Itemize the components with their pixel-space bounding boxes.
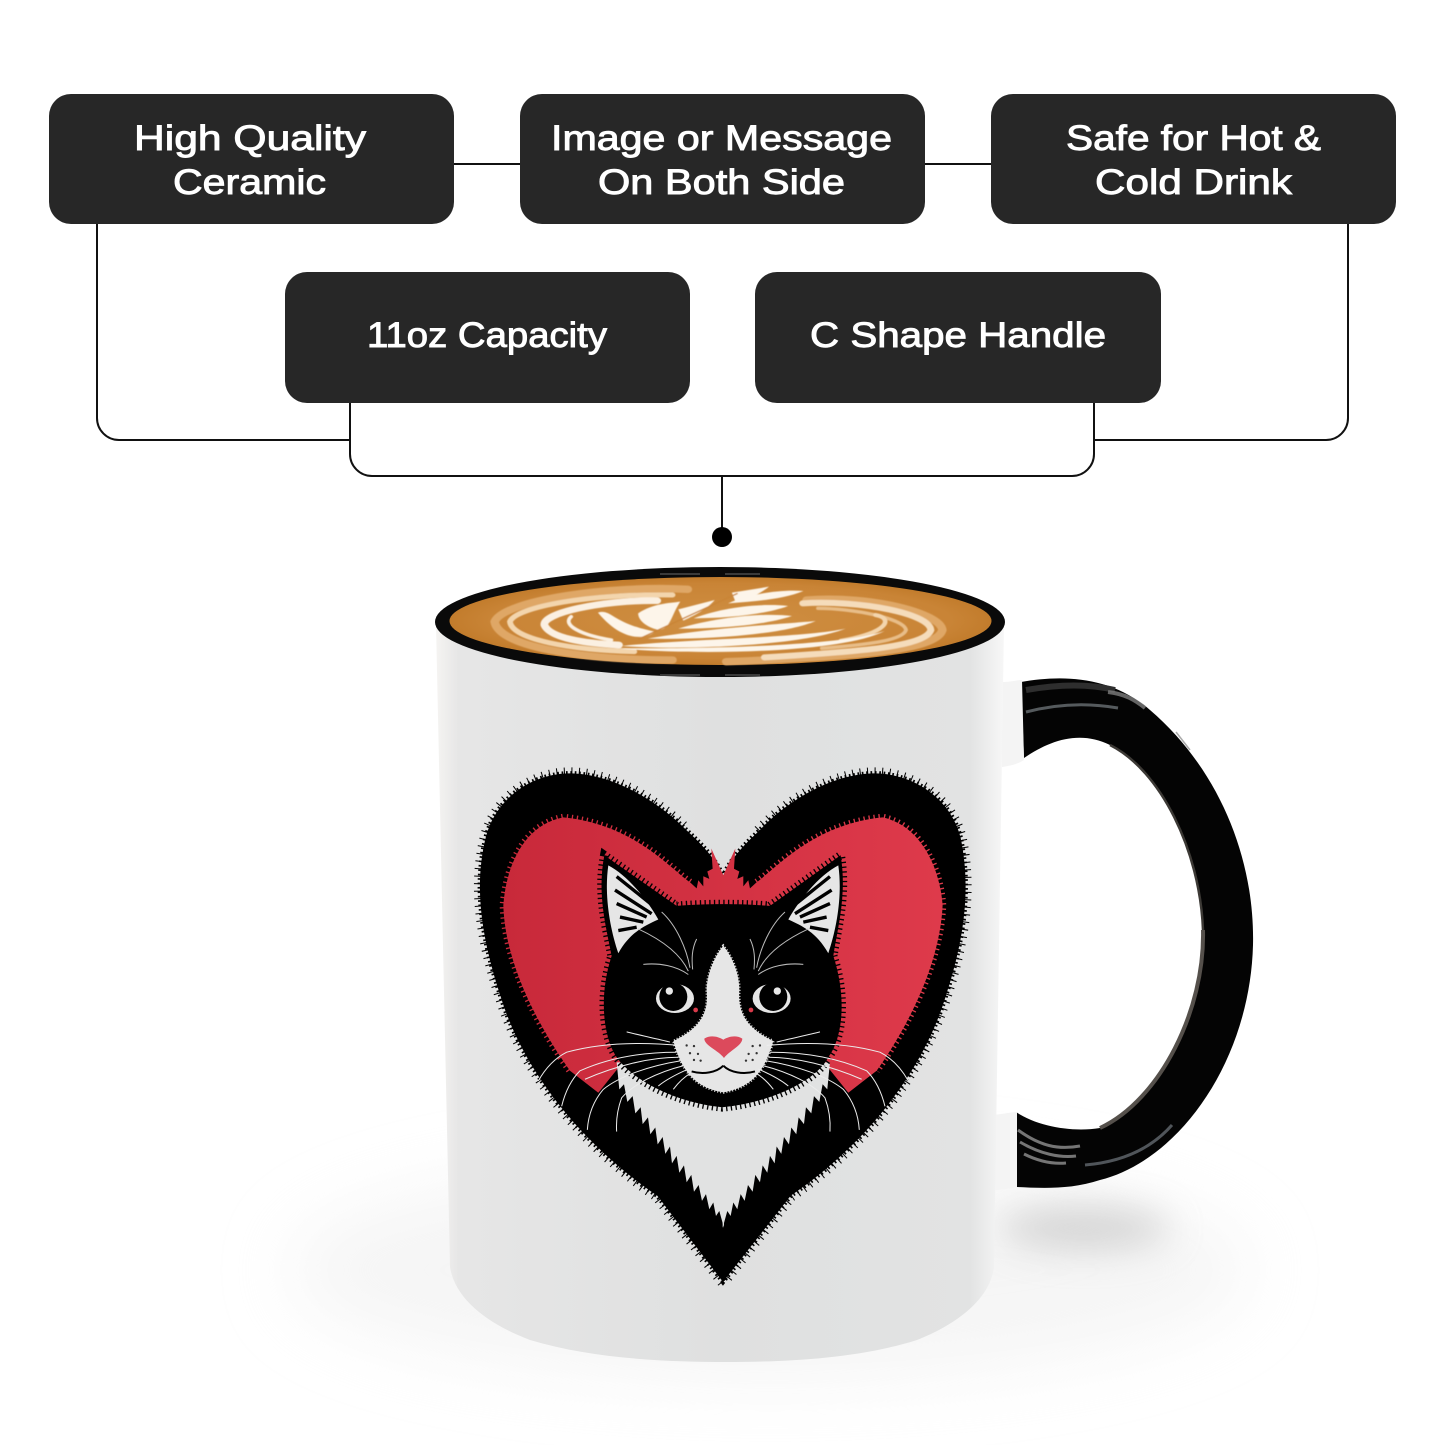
- white face blaze and muzzle: [673, 946, 773, 1092]
- feature box: High Quality Ceramic: [49, 94, 454, 224]
- feature box: Image or Message On Both Side: [520, 94, 925, 224]
- feature box: C Shape Handle: [755, 272, 1161, 403]
- right half face details: [723, 865, 908, 1132]
- feature box: 11oz Capacity: 11oz Capacity: [367, 316, 608, 355]
- feature box: Safe for Hot & Cold Drink: Safe for Hot &: [1066, 119, 1321, 158]
- mug body: [436, 625, 1024, 1362]
- mug ground shadow: [290, 1160, 1250, 1380]
- feature box: Safe for Hot & Cold Drink: Cold Drink: [1095, 163, 1293, 202]
- red heart interior: [503, 817, 943, 1093]
- feature box: High Quality Ceramic: High Quality: [134, 119, 367, 158]
- left half face details: [538, 865, 723, 1132]
- heart of black tails: [480, 773, 966, 1282]
- white chest bib: [617, 1062, 830, 1228]
- coffee with latte art: [450, 577, 992, 665]
- feature box: Safe for Hot & Cold Drink: [991, 94, 1396, 224]
- feature box: High Quality Ceramic: Ceramic: [173, 163, 326, 202]
- feature box: C Shape Handle: C Shape Handle: [810, 316, 1106, 355]
- mug rim: [435, 567, 1005, 677]
- feature box: 11oz Capacity: [285, 272, 690, 403]
- printed design: tuxedo cat in tail heart: [480, 773, 966, 1282]
- mug handle: [1016, 678, 1253, 1188]
- cat nose: [704, 1036, 742, 1058]
- connector end dot: [712, 527, 732, 547]
- cat head: [602, 855, 843, 1107]
- feature box: Image or Message On Both Side: Image or Message: [551, 119, 892, 158]
- feature box: Image or Message On Both Side: On Both Side: [598, 163, 845, 202]
- red fur fringe on tail undersides: [503, 817, 943, 1071]
- connector lines: [97, 164, 1348, 537]
